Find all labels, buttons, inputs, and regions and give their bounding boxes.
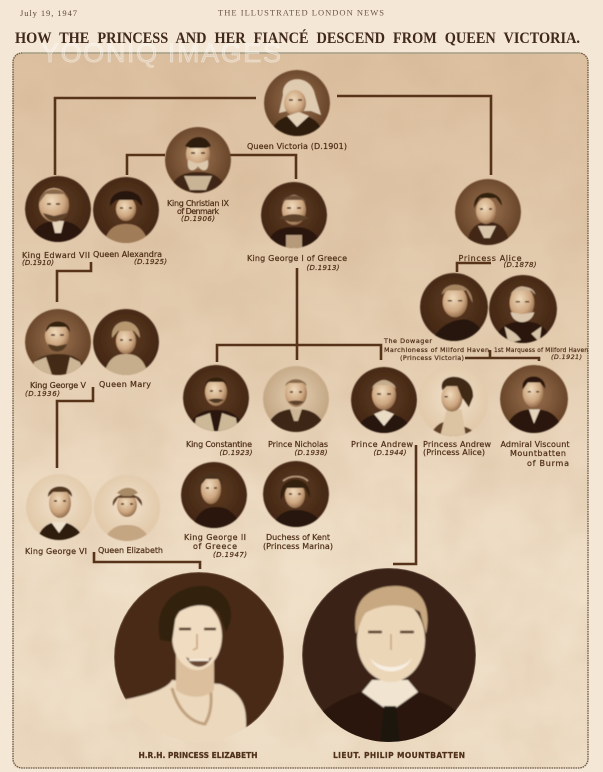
portrait: Prince Nicholas: [263, 366, 329, 432]
caption: H.R.H. Princess Elizabeth: H.R.H. PRINCESS ELIZABETH: [138, 751, 258, 760]
caption: Princess Alice: (D.1878): [504, 261, 537, 269]
caption: Admiral Viscount Mountbatten of Burma: of Burma: [527, 459, 569, 468]
caption: Queen Alexandra: (D.1925): [134, 258, 167, 266]
portrait: Princess Alice: [455, 179, 521, 245]
caption: Prince Andrew: (D.1944): [374, 449, 407, 457]
portrait: King Christian IX: [165, 127, 231, 193]
page header: publication name: THE ILLUSTRATED LONDON NEWS: [218, 8, 384, 18]
caption: Queen Victoria: Queen Victoria (D.1901): [247, 142, 347, 151]
caption: Admiral Viscount Mountbatten of Burma: Admiral Viscount: [500, 440, 570, 449]
caption: King Christian IX: (D.1906): [181, 215, 215, 223]
caption: Duchess of Kent: (Princess Marina): [263, 542, 333, 551]
portraits: [25, 70, 568, 541]
caption: The Dowager Marchioness: (Princess Victoria): [400, 354, 464, 362]
caption: King Christian IX: of Denmark: [177, 207, 219, 216]
caption: Lieut. Philip Mountbatten: LIEUT. PHILIP MOUNTBATTEN: [333, 751, 465, 760]
caption: 1st Marquess of Milford Haven: [494, 348, 588, 361]
caption: Prince Andrew: [351, 440, 413, 457]
watermark: YOONIQ IMAGES: [41, 38, 281, 68]
portrait: Admiral Viscount Mountbatten: [500, 365, 568, 433]
caption: King Edward VII: King Edward VII: [22, 251, 90, 260]
caption: The Dowager Marchioness: [383, 337, 489, 362]
connector lines of the family tree: [55, 96, 539, 569]
caption: King Edward VII: [22, 251, 90, 267]
caption: Queen Mary: Queen Mary: [99, 380, 151, 389]
caption: Prince Nicholas: Prince Nicholas: [268, 440, 328, 449]
caption: Queen Elizabeth: Queen Elizabeth: [98, 546, 163, 555]
caption: The Dowager Marchioness: Marchioness of Milford Haven: [384, 346, 489, 354]
caption: Duchess of Kent: [263, 533, 333, 551]
caption: King George II of Greece: of Greece: [193, 542, 237, 551]
caption: Admiral Viscount Mountbatten of Burma: [500, 440, 570, 468]
caption: King George V: (D.1936): [25, 390, 60, 398]
caption: Admiral Viscount Mountbatten of Burma: Mountbatten: [510, 449, 566, 458]
caption: Prince Nicholas: (D.1938): [294, 449, 328, 457]
caption: The Dowager Marchioness: The Dowager: [383, 337, 432, 345]
caption: Princess Andrew: Princess Andrew: [423, 440, 491, 449]
portrait: H.R.H. Princess Elizabeth: [114, 572, 284, 748]
caption: King George V: [25, 381, 87, 398]
caption: Queen Alexandra: Queen Alexandra: [93, 250, 162, 259]
caption: King Constantine: [186, 440, 253, 457]
caption: King Edward VII: (D.1910): [22, 259, 54, 267]
portrait: King George I of Greece: [261, 182, 327, 248]
portrait: Duchess of Kent: [263, 461, 329, 527]
caption: King Constantine: King Constantine: [186, 440, 252, 449]
caption: Duchess of Kent: Duchess of Kent: [266, 533, 330, 542]
portrait: Princess Andrew: [417, 376, 487, 436]
caption: King George II of Greece: (D.1947): [213, 551, 247, 559]
caption: 1st Marquess of Milford Haven: (D.1921): [551, 353, 582, 361]
portrait: Queen Alexandra: [93, 177, 159, 243]
portrait: The Dowager Marchioness of Milford Haven: [420, 273, 488, 341]
caption: Prince Nicholas: [268, 440, 328, 457]
portrait: Queen Victoria: [264, 70, 330, 136]
portrait: Queen Mary: [93, 309, 159, 375]
caption: King George I of Greece: [247, 254, 347, 272]
portrait: King Constantine: [183, 365, 249, 431]
portrait: Prince Andrew: [351, 367, 417, 433]
captions: [22, 142, 588, 760]
portrait: 1st Marquess of Milford Haven: [489, 275, 557, 343]
caption: King Christian IX: [167, 199, 230, 223]
caption: King Constantine: (D.1923): [220, 449, 253, 457]
caption: Queen Alexandra: [93, 250, 167, 266]
portrait: Lieut. Philip Mountbatten: [298, 568, 480, 745]
caption: King George II of Greece: [184, 533, 247, 559]
caption: Prince Andrew: Prince Andrew: [351, 440, 413, 449]
portrait: King George II of Greece: [181, 462, 247, 528]
caption: Princess Alice: Princess Alice: [458, 254, 522, 263]
page header: date: July 19, 1947: [20, 8, 77, 18]
caption: King George II of Greece: King George II: [184, 533, 246, 542]
caption: King George I of Greece: King George I of Greece: [247, 254, 347, 263]
caption: Princess Andrew: (Princess Alice): [423, 448, 485, 457]
portrait: Queen Elizabeth: [94, 475, 160, 541]
caption: 1st Marquess of Milford Haven: 1st Marquess of Milford Haven: [494, 348, 588, 354]
caption: Princess Andrew: [423, 440, 491, 457]
caption: King George VI: King George VI: [25, 547, 87, 556]
caption: King George V: King George V: [30, 381, 87, 390]
caption: King Christian IX: King Christian IX: [167, 199, 230, 208]
caption: King George I of Greece: (D.1913): [306, 264, 340, 272]
caption: Princess Alice: [458, 254, 537, 269]
portrait: King Edward VII: [25, 176, 91, 242]
portrait: King George VI: [26, 474, 92, 540]
portrait: King George V: [25, 309, 91, 375]
